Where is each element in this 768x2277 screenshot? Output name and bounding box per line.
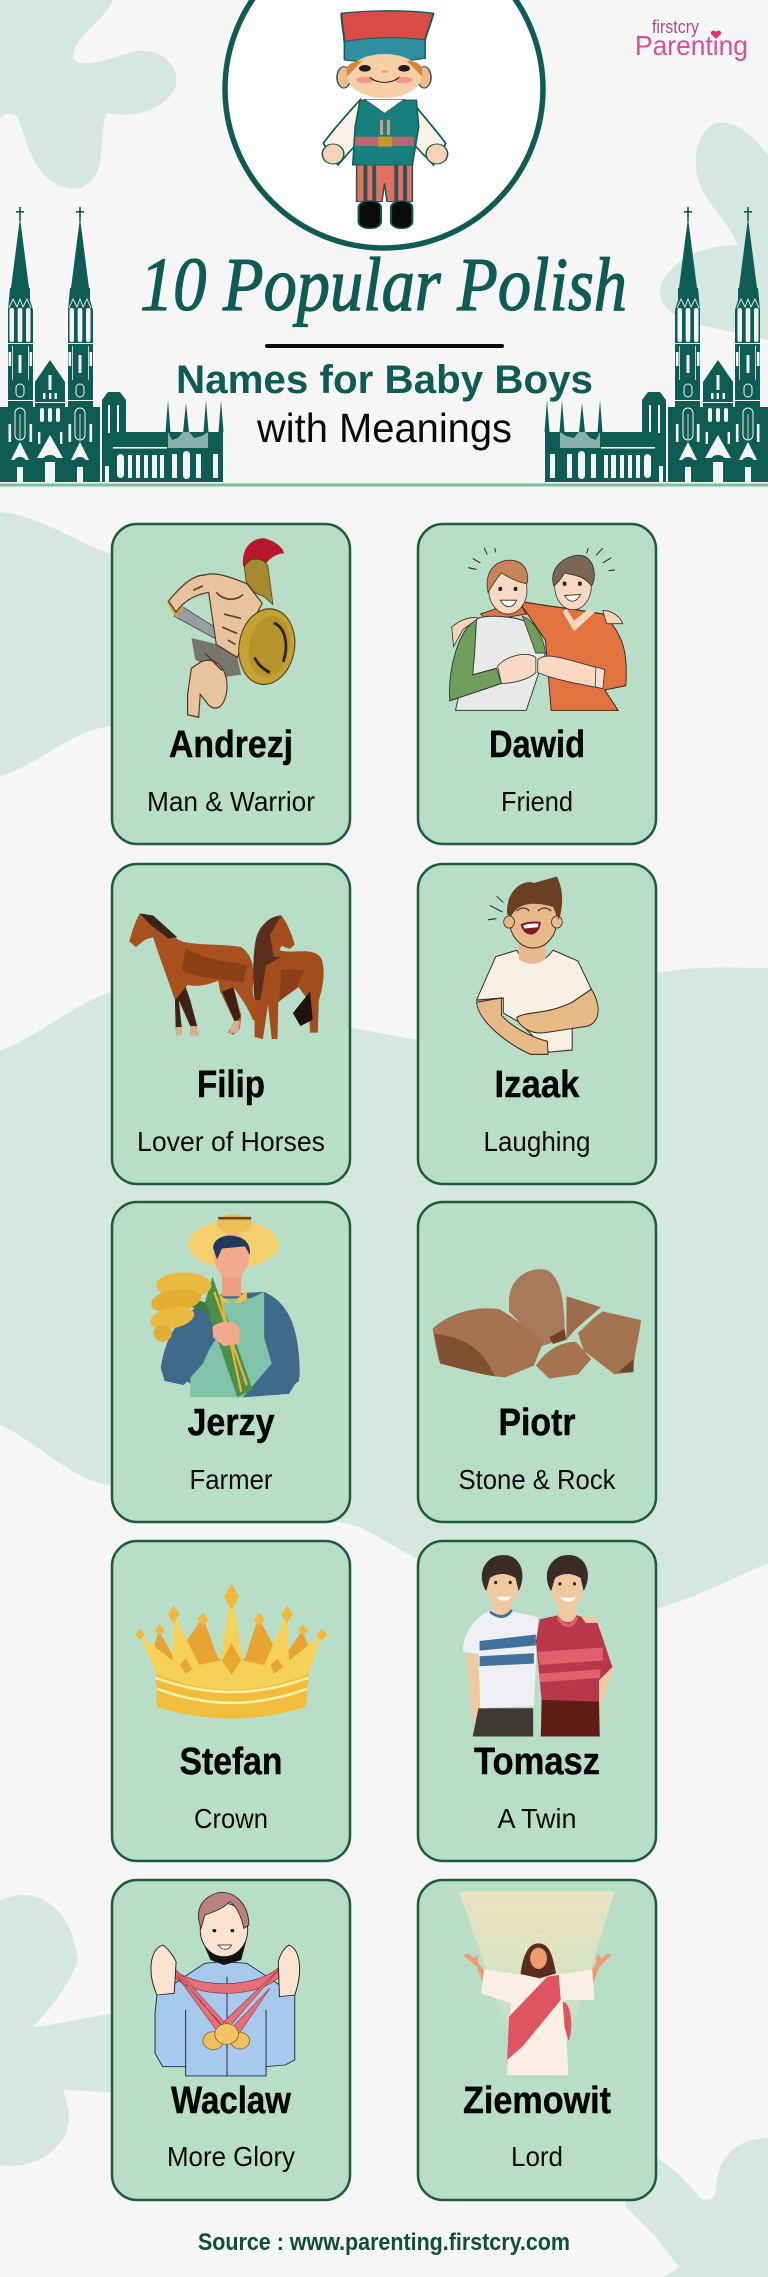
card: Andrezj	[112, 524, 350, 844]
logo heart	[711, 31, 721, 39]
card background	[112, 1202, 350, 1522]
illustration: laughing man	[477, 876, 598, 1054]
illustration: left cathedral	[0, 207, 224, 482]
logo word Parenting: Parenting	[635, 30, 748, 61]
name: Ziemowit	[463, 2080, 611, 2122]
illustration: two horses	[129, 913, 324, 1039]
card background	[112, 524, 350, 844]
card background	[418, 1541, 656, 1861]
meaning: More Glory	[167, 2141, 295, 2172]
meaning: Farmer	[190, 1464, 272, 1495]
meaning: Lord	[511, 2141, 563, 2172]
name: Izaak	[494, 1064, 580, 1106]
card background	[112, 864, 350, 1184]
card: Dawid	[418, 524, 656, 844]
header divider line	[0, 484, 768, 486]
meaning: Friend	[501, 786, 573, 817]
meaning: Crown	[194, 1803, 268, 1834]
source footer: Source : www.parenting.firstcry.com	[198, 2229, 570, 2256]
name: Waclaw	[171, 2080, 291, 2122]
card background	[418, 864, 656, 1184]
card: Stefan	[112, 1541, 350, 1861]
name: Andrezj	[169, 724, 293, 766]
illustration: golden crown	[135, 1584, 327, 1718]
meaning: Man & Warrior	[147, 786, 315, 817]
illustration: right cathedral	[544, 207, 768, 482]
meaning: Stone & Rock	[458, 1464, 616, 1495]
meaning: Laughing	[484, 1126, 590, 1157]
card: Izaak	[418, 864, 656, 1184]
hero circle with Polish boy	[225, 0, 543, 248]
title underline rule	[265, 344, 504, 348]
card: Tomasz	[418, 1541, 656, 1861]
card: Jerzy	[112, 1202, 350, 1522]
illustration: farmer with wheat	[149, 1214, 300, 1397]
white circle	[225, 0, 543, 248]
card background	[112, 1541, 350, 1861]
meaning: A Twin	[498, 1803, 576, 1834]
name: Tomasz	[474, 1741, 600, 1783]
name: Jerzy	[188, 1402, 274, 1444]
card: Filip	[112, 864, 350, 1184]
subtitle: with Meanings: with Meanings	[256, 405, 512, 451]
name: Dawid	[489, 724, 585, 766]
logo word firstcry: firstcry	[652, 17, 699, 37]
name: Piotr	[498, 1402, 576, 1444]
illustration: two friends	[449, 548, 626, 710]
card: Piotr	[418, 1202, 656, 1522]
logo: firstcry parenting	[635, 17, 748, 61]
icon: boy in folk costume	[322, 11, 448, 228]
illustration: pile of rocks	[433, 1269, 641, 1379]
name: Stefan	[180, 1741, 282, 1783]
card background	[112, 1880, 350, 2200]
meaning: Lover of Horses	[137, 1126, 325, 1157]
illustration: man holding medals	[151, 1892, 300, 2076]
illustration: Spartan warrior	[167, 538, 302, 717]
card background	[418, 1880, 656, 2200]
illustration: twin brothers	[463, 1555, 612, 1736]
name: Filip	[197, 1064, 265, 1106]
card: Ziemowit	[418, 1880, 656, 2200]
illustration: Jesus with light rays	[459, 1892, 614, 2075]
title: 10 Popular Polish: 10 Popular Polish	[140, 243, 627, 327]
card: Waclaw	[112, 1880, 350, 2200]
card background	[418, 524, 656, 844]
card background	[418, 1202, 656, 1522]
subtitle: Names for Baby Boys: Names for Baby Boys	[176, 358, 593, 402]
